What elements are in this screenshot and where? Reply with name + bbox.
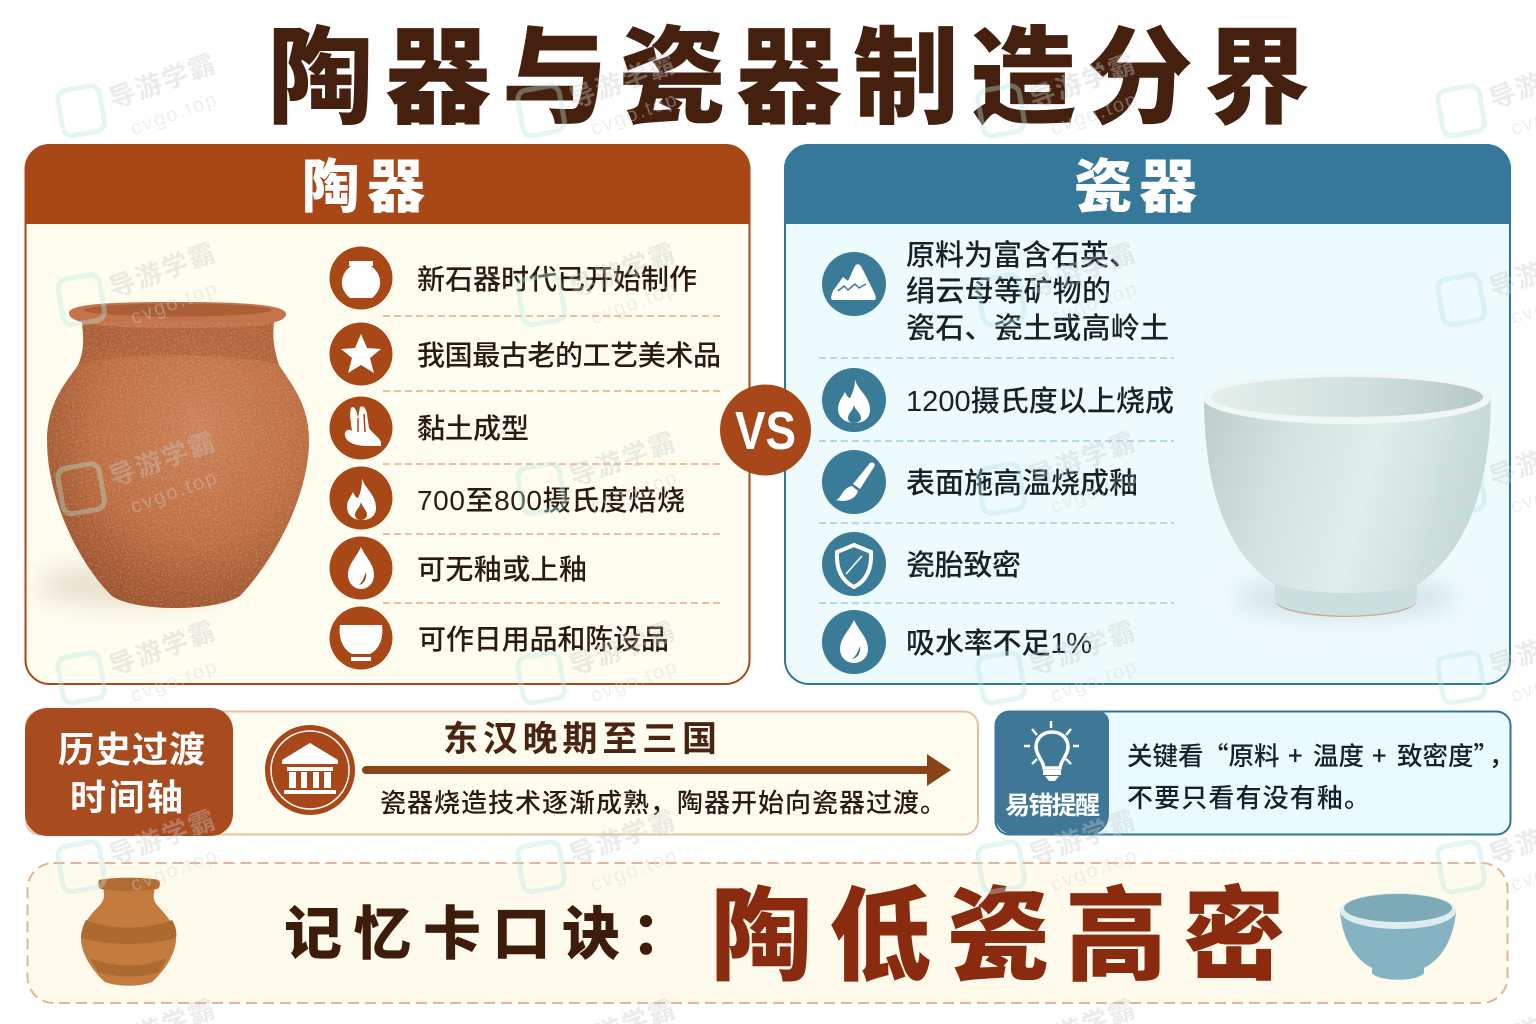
watermark: cvgo.top — [1048, 655, 1141, 707]
text: glaze: 可无釉或上釉 — [417, 554, 587, 585]
watermark: 导游学霸 — [105, 615, 221, 681]
timeline label: 时间轴 — [70, 777, 183, 818]
VS badge — [720, 384, 811, 476]
pottery header bar — [25, 144, 750, 224]
text: clay: 黏土成型 — [417, 413, 529, 444]
watermark: cvgo.top — [1048, 88, 1141, 140]
watermark: cvgo.top — [128, 466, 221, 518]
icon: flame — [330, 466, 392, 530]
watermark: 导游学霸 — [105, 237, 221, 303]
watermark: 导游学霸 — [565, 615, 681, 681]
watermark: cvgo.top — [1048, 844, 1141, 896]
timeline label — [25, 708, 233, 836]
text: raw material: 瓷石、瓷土或高岭土 — [906, 312, 1169, 345]
panel: pottery — [25, 144, 750, 684]
icon: bowl — [330, 606, 392, 670]
watermark: cvgo.top — [128, 655, 221, 707]
icon: drop — [822, 610, 886, 674]
text: 1200: 1200摄氏度以上烧成 — [906, 385, 1174, 418]
text: absorption: 吸水率不足1% — [906, 627, 1092, 660]
mnemonic label: 记忆卡口诀： — [284, 902, 701, 967]
text: raw material: 绢云母等矿物的 — [906, 275, 1111, 308]
tip text: 温度 — [1313, 736, 1364, 773]
text: oldest art: 我国最古老的工艺美术品 — [417, 340, 721, 371]
tip text — [1127, 736, 1515, 815]
watermark: cvgo.top — [588, 655, 681, 707]
watermark: 导游学霸 — [565, 426, 681, 492]
icon: mountain — [822, 252, 886, 316]
icon: temple — [265, 725, 355, 815]
icon: jar — [330, 246, 392, 310]
timeline heading: 东汉晚期至三国 — [443, 720, 717, 759]
watermark: 导游学霸 — [565, 804, 681, 870]
icon: small bowl — [1340, 893, 1456, 980]
watermark: cvgo.top — [128, 88, 221, 140]
watermark: 导游学霸 — [1025, 804, 1141, 870]
memory card — [28, 863, 1508, 1003]
icon: drop — [330, 536, 392, 600]
icon: brush — [822, 450, 886, 514]
watermark: cvgo.top — [588, 277, 681, 329]
text: 700-800: 700至800摄氏度焙烧 — [417, 485, 685, 516]
text: uses: 可作日用品和陈设品 — [418, 624, 669, 655]
tip text: 致密度” — [1397, 736, 1499, 773]
watermark: 导游学霸 — [105, 48, 221, 114]
timeline label: 历史过渡 — [58, 729, 205, 770]
porcelain header bar — [784, 144, 1511, 224]
text: raw material: 原料为富含石英、 — [906, 239, 1138, 272]
tip label — [995, 711, 1109, 835]
icon: light bulb — [1024, 721, 1079, 781]
text: glaze: 表面施高温烧成釉 — [906, 467, 1138, 500]
tip panel — [995, 711, 1515, 835]
watermark: 导游学霸 — [565, 48, 681, 114]
text: dense: 瓷胎致密 — [906, 549, 1021, 582]
watermark: cvgo.top — [588, 88, 681, 140]
watermark: cvgo.top — [128, 277, 221, 329]
tip label text: 易错提醒 — [1005, 792, 1100, 820]
icon: hands — [330, 396, 392, 460]
tip text: + — [1372, 736, 1387, 773]
mnemonic: 陶低瓷高密 — [711, 880, 1285, 994]
watermark: 导游学霸 — [1025, 615, 1141, 681]
porcelain heading: 瓷器 — [1074, 155, 1197, 220]
tip text: 关键看 — [1127, 736, 1204, 773]
icon: small jar — [81, 878, 176, 986]
timeline text: 瓷器烧造技术逐渐成熟，陶器开始向瓷器过渡。 — [380, 788, 946, 818]
image: celadon cup — [1203, 372, 1491, 618]
title: 陶器与瓷器制造分界 — [268, 20, 1310, 138]
watermark: cvgo.top — [588, 466, 681, 518]
watermark: cvgo.top — [128, 844, 221, 896]
VS badge: VS — [735, 401, 796, 461]
watermark: 导游学霸 — [105, 804, 221, 870]
icon: shield — [822, 532, 886, 596]
watermark: 导游学霸 — [1025, 48, 1141, 114]
watermark: 导游学霸 — [1025, 426, 1141, 492]
watermark: cvgo.top — [1048, 466, 1141, 518]
watermark: 导游学霸 — [1025, 237, 1141, 303]
timeline panel — [25, 708, 978, 836]
watermark: cvgo.top — [588, 844, 681, 896]
icon: flame — [822, 368, 886, 432]
watermark: 导游学霸 — [105, 426, 221, 492]
text: neolithic: 新石器时代已开始制作 — [417, 264, 697, 295]
image: terracotta jar — [35, 302, 309, 608]
text: raw material — [906, 239, 1169, 345]
pottery heading: 陶器 — [302, 155, 425, 220]
tip text: + — [1288, 736, 1303, 773]
tip text: ， — [1489, 736, 1515, 773]
icon: star — [330, 322, 392, 386]
tip text: “原料 — [1203, 736, 1280, 773]
tip text: 不要只看有没有釉。 — [1127, 778, 1370, 815]
watermark: cvgo.top — [1048, 277, 1141, 329]
arrow — [362, 754, 951, 786]
watermark: 导游学霸 — [565, 237, 681, 303]
panel: porcelain — [784, 144, 1511, 684]
